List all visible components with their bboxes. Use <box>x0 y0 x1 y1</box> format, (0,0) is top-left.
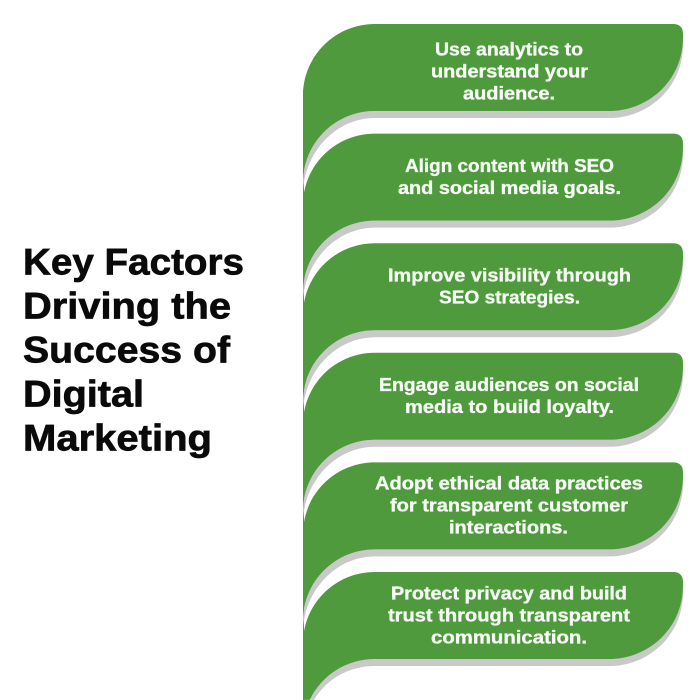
panel text: protect privacy: communication. <box>431 628 587 648</box>
panel text: ethical data: interactions. <box>449 518 568 538</box>
title: Key Factors <box>23 242 244 283</box>
panel text: engage audiences: media to build loyalty. <box>405 397 614 417</box>
panel: protect privacy <box>303 572 683 700</box>
panel text: align content: Align content with SEO <box>405 156 614 176</box>
title: Digital <box>23 374 144 415</box>
panel text: use analytics: audience. <box>463 84 555 104</box>
left spine <box>303 90 304 700</box>
panel: ethical data <box>303 462 683 628</box>
panel text: use analytics: understand your <box>431 62 588 82</box>
panel text: ethical data: for transparent customer <box>390 496 628 516</box>
panel: use analytics <box>303 24 683 190</box>
panel text: improve visibility: SEO strategies. <box>439 288 580 308</box>
panel text: protect privacy <box>388 584 630 648</box>
title <box>23 242 244 459</box>
panel text: align content <box>398 156 621 198</box>
panel text: improve visibility: Improve visibility through <box>388 266 631 286</box>
panel text: engage audiences <box>379 375 639 417</box>
panel text: ethical data <box>375 474 643 538</box>
panel text: improve visibility <box>388 266 631 308</box>
panel: improve visibility <box>303 243 683 409</box>
panel text: engage audiences: Engage audiences on social <box>379 375 639 395</box>
title: Success of <box>23 330 231 371</box>
panel: engage audiences <box>303 353 683 519</box>
title: Driving the <box>23 286 231 327</box>
title: Marketing <box>23 418 212 459</box>
panel text: use analytics <box>431 40 588 104</box>
panel text: align content: and social media goals. <box>398 178 621 198</box>
panel text: protect privacy: trust through transparent <box>388 606 630 626</box>
panel: align content <box>303 134 683 300</box>
panel text: ethical data: Adopt ethical data practices <box>375 474 643 494</box>
panel text: protect privacy: Protect privacy and build <box>391 584 627 604</box>
panel text: use analytics: Use analytics to <box>435 40 583 60</box>
